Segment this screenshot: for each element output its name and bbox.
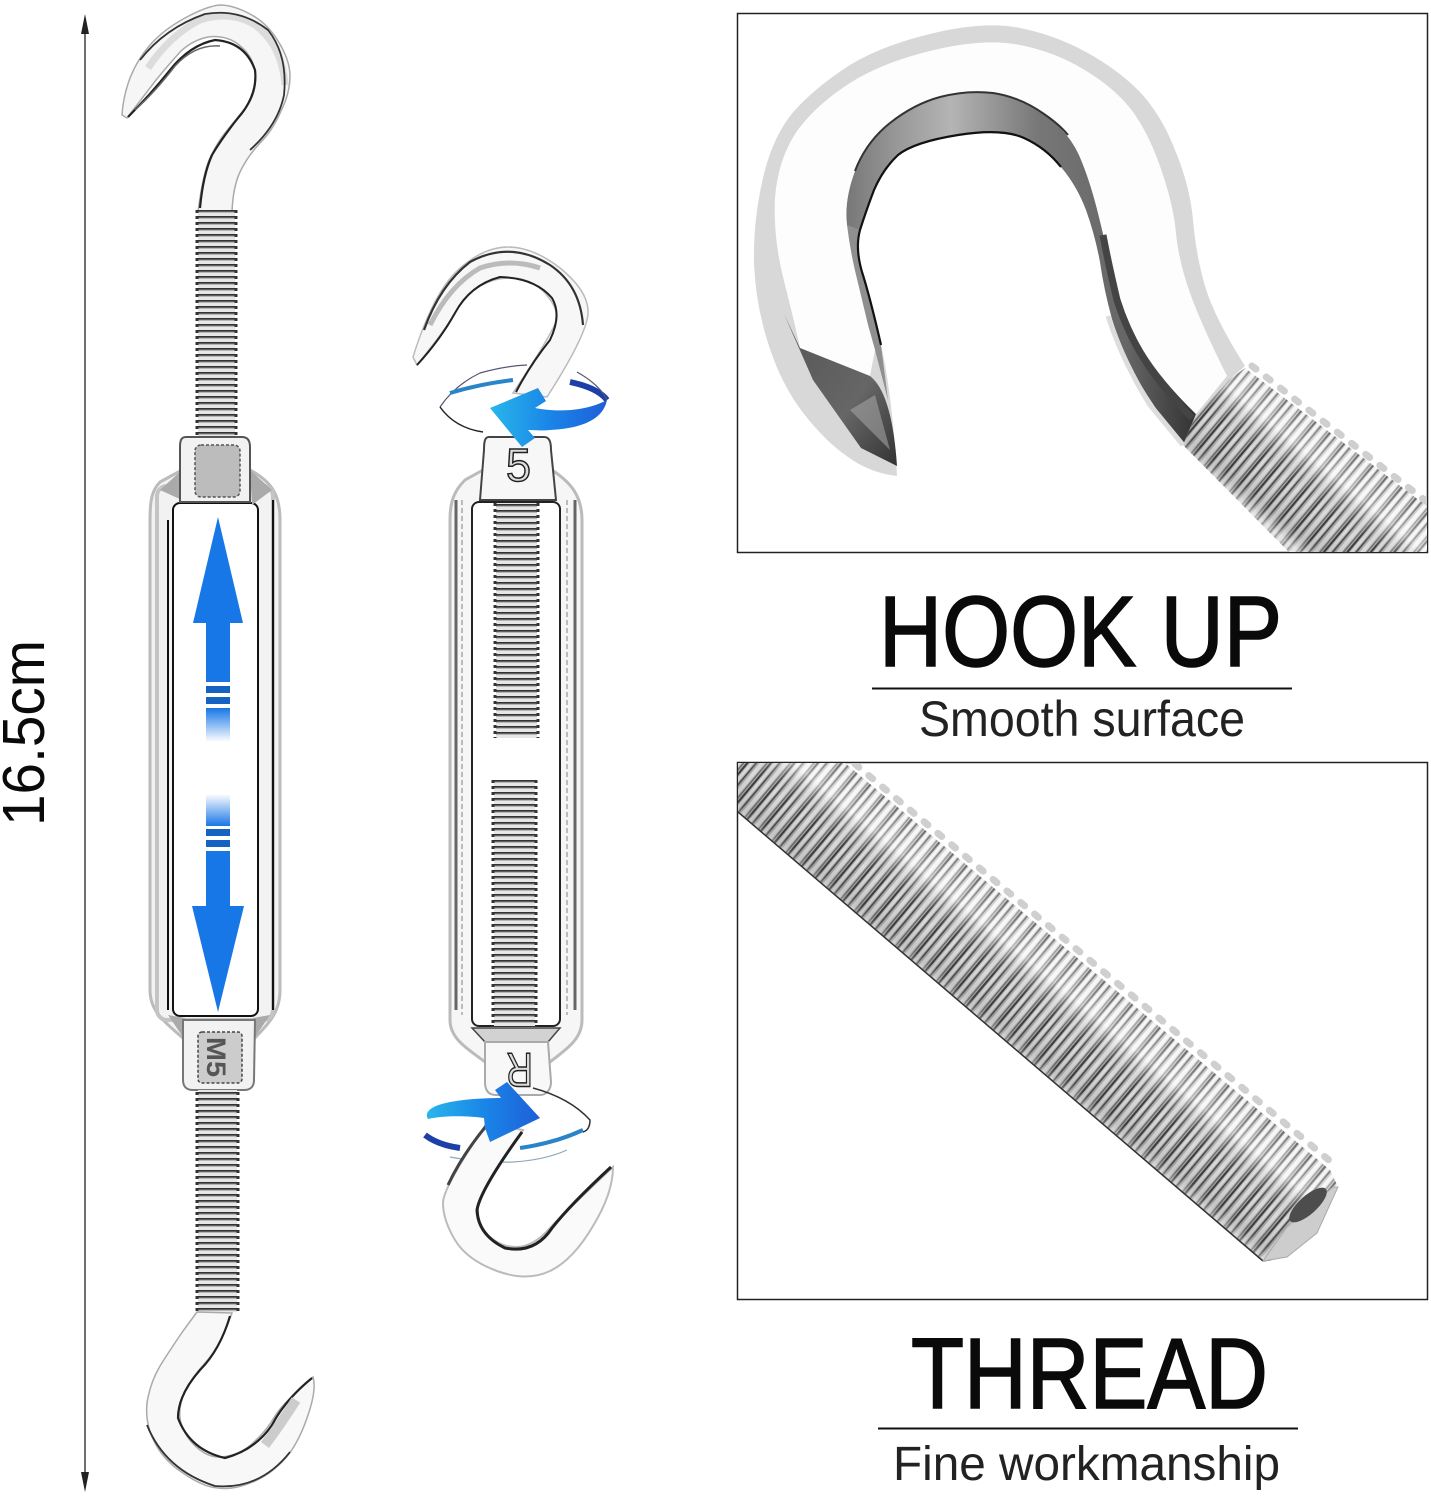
rod end cap xyxy=(1263,1187,1338,1261)
long turnbuckle (left) xyxy=(122,5,314,1488)
body xyxy=(450,470,582,1062)
top end block xyxy=(180,437,250,502)
stamped 5: 5 xyxy=(506,439,531,491)
blue swivel arrow top xyxy=(490,388,607,447)
heading: THREAD: THREAD xyxy=(911,1318,1268,1430)
bottom hook xyxy=(147,1312,314,1488)
bottom end block xyxy=(183,1020,255,1090)
bottom hook xyxy=(443,1123,613,1276)
heading: HOOK UP: HOOK UP xyxy=(879,576,1282,688)
bottom block with R xyxy=(485,1042,551,1095)
caption: Smooth surface: Smooth surface xyxy=(919,691,1245,747)
shank light rim xyxy=(1108,316,1183,445)
blue swivel arrow bottom xyxy=(427,1082,540,1142)
bottom thread xyxy=(197,1090,238,1312)
dark band edges xyxy=(858,132,1061,345)
threaded shank xyxy=(1183,368,1428,552)
upper inner thread xyxy=(495,503,538,738)
rotation ring top xyxy=(440,365,607,432)
panel: hook close-up xyxy=(738,14,1431,552)
blue double arrow xyxy=(192,517,244,1012)
short swivel turnbuckle (middle) xyxy=(413,247,613,1276)
turnbuckle body xyxy=(150,470,280,1040)
thread teeth xyxy=(1252,366,1431,509)
left inner band down to tip xyxy=(847,225,888,400)
hook tip xyxy=(784,314,897,466)
centre hole xyxy=(1289,1188,1327,1222)
threaded rod xyxy=(738,763,1338,1262)
dimension line: 16.5cm xyxy=(0,14,89,1492)
rotation ring bottom xyxy=(425,1088,590,1162)
top thread xyxy=(197,210,236,438)
lower inner thread xyxy=(493,780,536,1027)
thread teeth xyxy=(855,764,1336,1166)
top hook xyxy=(413,247,588,397)
stamped mark: M5 xyxy=(201,1037,231,1077)
inner dark band xyxy=(846,92,1196,445)
caption: Fine workmanship: Fine workmanship xyxy=(893,1438,1280,1491)
stamped R: R xyxy=(506,1042,533,1095)
down arrow xyxy=(192,794,244,1012)
hook bright face xyxy=(775,42,1227,414)
hook base with grey rim xyxy=(754,25,1245,476)
panel: thread close-up xyxy=(738,762,1428,1300)
up arrow xyxy=(193,517,243,742)
top hook xyxy=(122,5,290,212)
top block with 5 xyxy=(480,437,556,500)
